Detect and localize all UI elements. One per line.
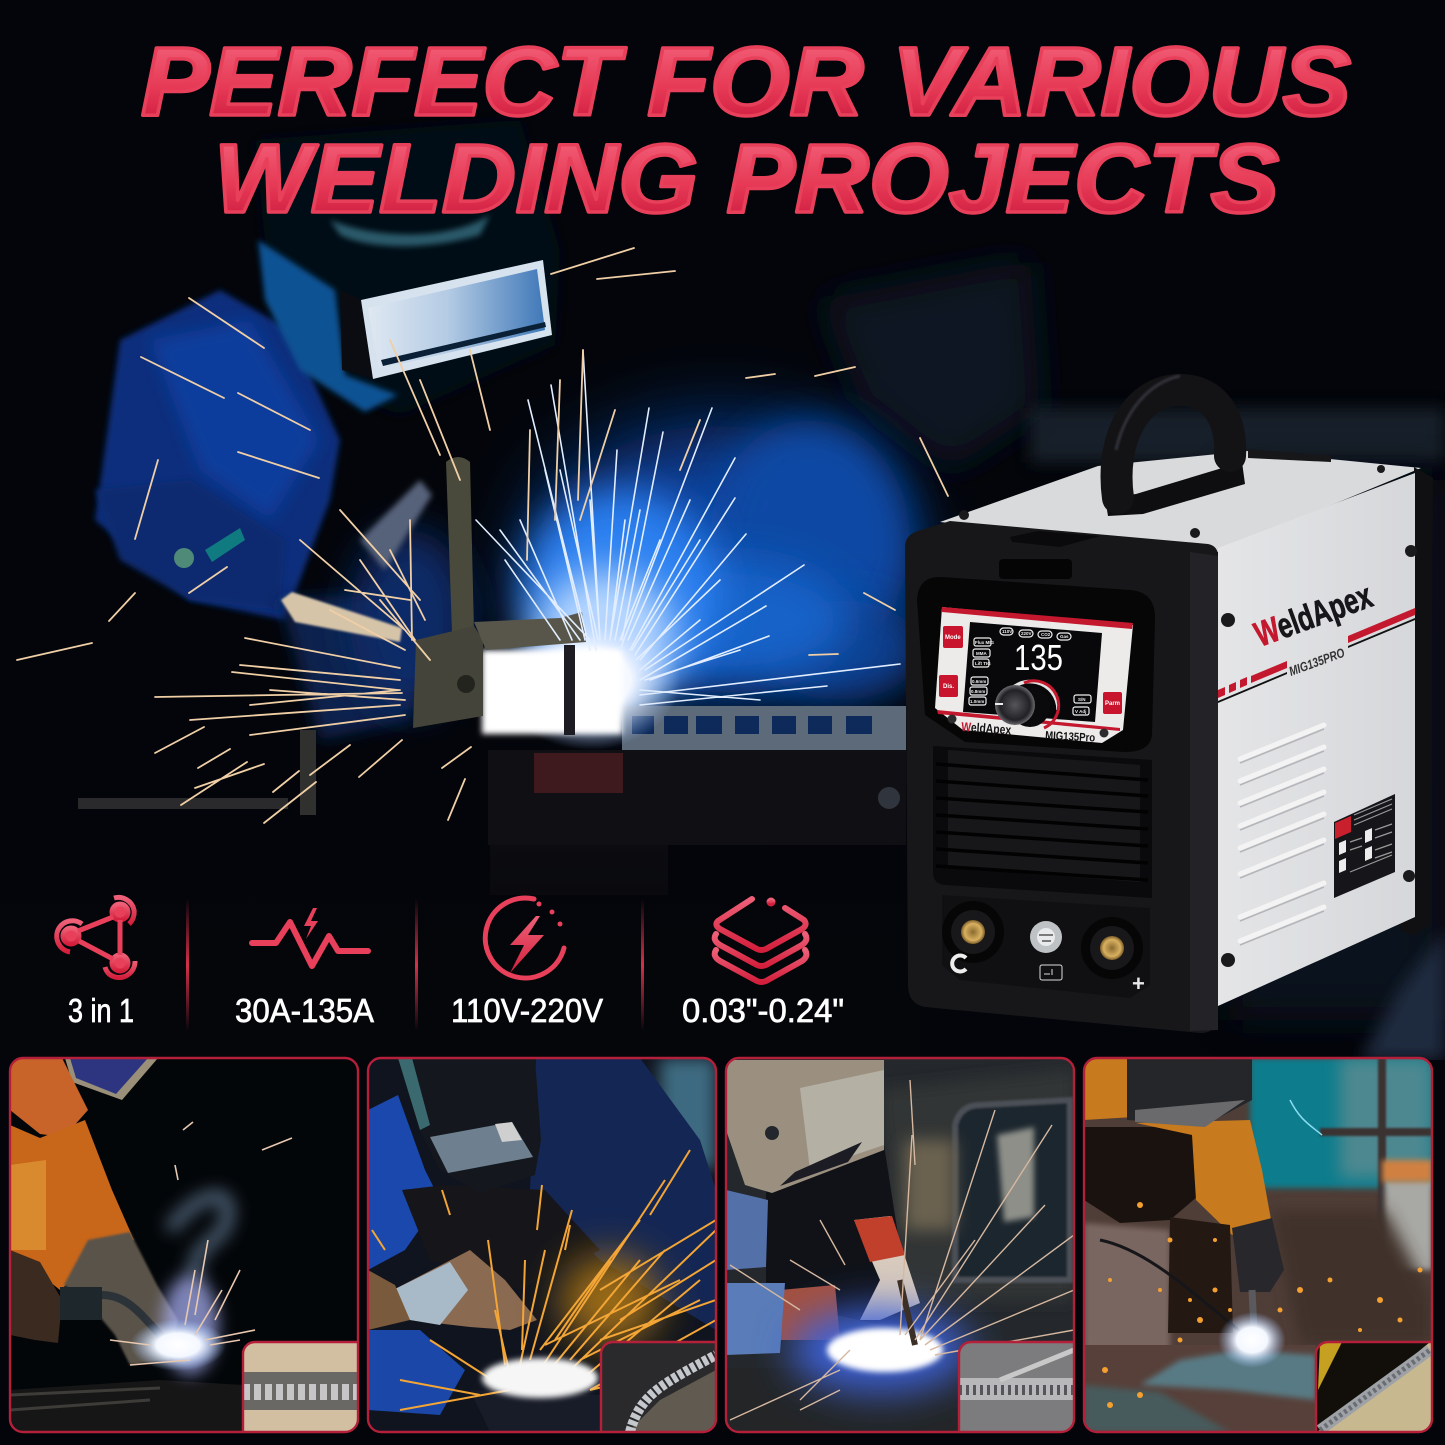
inset border (601, 1342, 716, 1432)
dividers (186, 898, 644, 1032)
sparks: cream orange (17, 248, 948, 823)
side screws (1221, 545, 1417, 967)
LCD mode labels: 0.6mm (972, 679, 986, 684)
LCD top indicators (969, 628, 1091, 715)
helmet visor (361, 260, 552, 379)
card border (726, 1058, 1074, 1432)
handle slot (999, 559, 1072, 579)
title (141, 27, 1351, 233)
floor (1084, 1345, 1316, 1432)
dark chest (402, 1186, 600, 1254)
spec labels: 0.03"-0.24" (682, 992, 844, 1029)
gloves (64, 1232, 178, 1365)
torch cable (1100, 1240, 1245, 1335)
parm button (1103, 692, 1122, 714)
LCD mode labels: V Adj (1075, 709, 1086, 714)
icon: voltage bolt (485, 898, 564, 978)
glove (393, 1250, 537, 1330)
bench (10, 1380, 243, 1432)
slag (1140, 1350, 1316, 1400)
title line 2: WELDING PROJECTS (214, 124, 1279, 233)
mode button (943, 626, 963, 648)
torch (900, 1280, 915, 1345)
black rear edge (1400, 467, 1433, 936)
panel logo: WeldApex (961, 719, 1012, 738)
photo card 2: blue jacket welder (368, 1058, 716, 1432)
steel frame (1320, 1058, 1432, 1248)
spec labels: 3 in 1 (68, 992, 134, 1029)
socket panel (942, 895, 1150, 998)
top screws (959, 465, 1385, 538)
welder jacket (95, 290, 420, 740)
glove (1232, 1218, 1284, 1292)
side vents (1240, 725, 1324, 941)
card border (10, 1058, 358, 1432)
arc glow (790, 1308, 970, 1392)
inset weld sample (1316, 1342, 1432, 1432)
spec labels: 30A-135A (235, 992, 374, 1029)
control panel bezel (917, 577, 1155, 752)
dark body (766, 1145, 905, 1330)
title line 1: PERFECT FOR VARIOUS (141, 27, 1351, 136)
handle base (1105, 462, 1245, 516)
background debris (1270, 1210, 1432, 1345)
carrying handle (1117, 390, 1230, 498)
panel screws (948, 714, 1108, 738)
LCD mode labels: Lift TIG (975, 661, 991, 666)
positive mark: + (1132, 971, 1145, 996)
bright blue sleeve (369, 1095, 434, 1270)
arc glow (162, 1275, 218, 1375)
workbench and rails (78, 706, 906, 856)
LCD readout: 135 (1014, 637, 1063, 678)
LCD mode labels: Gas (1060, 634, 1069, 639)
control panel: Mode (945, 635, 961, 641)
photo card 1: orange jacket welder (10, 1058, 358, 1432)
background fence (1030, 408, 1445, 1060)
brand logo: WeldApex (1249, 576, 1378, 655)
control panel: Parm (1105, 701, 1120, 707)
model name: MIG135PRO (1287, 645, 1347, 679)
torch (60, 1287, 102, 1320)
icon: three nodes (57, 897, 135, 978)
top bracket (1010, 531, 1100, 547)
LCD mode labels: 0.8mm (971, 689, 985, 694)
icon: current pulse (252, 908, 368, 966)
dark torso (1084, 1127, 1205, 1223)
blurred floor at left (1084, 1223, 1170, 1350)
front vent grille (933, 746, 1152, 898)
machine top (940, 451, 1421, 552)
sparks (730, 1080, 1074, 1420)
white arc flash (477, 629, 676, 748)
hero photo: welder with sparks (0, 120, 1445, 1060)
LCD mode labels: S/N (1078, 697, 1086, 702)
product: welding machine (905, 376, 1433, 1033)
front housing (905, 521, 1218, 1033)
background (660, 1058, 716, 1168)
right glove (854, 1216, 920, 1320)
spec labels: 110V-220V (451, 992, 603, 1029)
arc flash (1218, 1312, 1286, 1368)
orange sparks (372, 1150, 716, 1410)
photo card 3: workshop welder with light helmet (726, 1058, 1074, 1432)
welding helmet (530, 1066, 541, 1176)
inset border (243, 1342, 358, 1432)
negative socket (942, 901, 1004, 963)
photo card 4: outdoor welder with teal backdrop (1084, 1058, 1432, 1432)
control panel (935, 607, 1133, 745)
gas connector (1030, 921, 1062, 953)
bench (470, 1390, 600, 1432)
card border (1084, 1058, 1432, 1432)
negative mark (952, 956, 966, 972)
LCD mode labels: Flux MIG (975, 640, 994, 645)
LCD mode labels: CO2 (1041, 632, 1051, 637)
control panel: Dis. (943, 684, 954, 690)
navy jacket (530, 1058, 716, 1330)
white flash (482, 1358, 598, 1398)
welding torch (281, 480, 432, 642)
LCD mode labels: 220V (1021, 631, 1032, 636)
left glove (780, 1285, 840, 1340)
arc flash (130, 1319, 226, 1371)
side panel (1218, 473, 1417, 1006)
blue arc glow and smoke (350, 420, 920, 710)
inset border (959, 1342, 1074, 1432)
floor (726, 1368, 1074, 1432)
welder helmet (255, 120, 560, 415)
LCD mode labels (970, 629, 1086, 714)
positive socket (1081, 917, 1143, 979)
welding helmet (726, 1060, 884, 1193)
orange jacket (1084, 1058, 1134, 1120)
inset weld sample (959, 1342, 1074, 1432)
dis button (939, 675, 958, 697)
front highlight (1190, 552, 1218, 1031)
ember dots (1102, 1202, 1422, 1408)
rear top rail (1248, 449, 1331, 462)
blurred workshop (880, 1070, 1074, 1300)
helmet visor (430, 1122, 533, 1173)
control knob (995, 681, 1059, 728)
warning label (1334, 794, 1395, 898)
shoulder in shadow (820, 260, 1040, 470)
sparks: white blue (476, 350, 900, 705)
orange sleeve (10, 1058, 88, 1137)
spec labels (68, 992, 844, 1029)
handle highlight (1116, 376, 1180, 450)
welding helmet (1127, 1058, 1252, 1125)
red stripes (1218, 608, 1415, 703)
inset weld sample (243, 1342, 358, 1432)
LCD mode labels: 1.0mm (970, 699, 984, 704)
sparks (110, 1122, 292, 1365)
card border (368, 1058, 716, 1432)
inset weld sample (601, 1342, 716, 1432)
welding clamp (413, 457, 586, 735)
LCD mode labels: 110V (1002, 629, 1012, 634)
teal backdrop (1250, 1058, 1432, 1188)
arc flash (827, 1328, 943, 1372)
hot glow (560, 1255, 660, 1345)
LCD mode labels: MMA (976, 651, 987, 656)
icon: stacked layers (715, 899, 806, 982)
helmet visor (65, 1058, 158, 1100)
spec row (57, 897, 844, 1032)
darken lower hero (0, 830, 920, 1060)
electric wisp (1290, 1100, 1322, 1135)
torch symbol (1040, 965, 1062, 980)
LCD screen (963, 622, 1102, 722)
smoke (170, 1196, 228, 1280)
inset border (1316, 1342, 1432, 1432)
dark trousers (1168, 1217, 1233, 1333)
panel model: MIG135Pro (1045, 730, 1095, 745)
